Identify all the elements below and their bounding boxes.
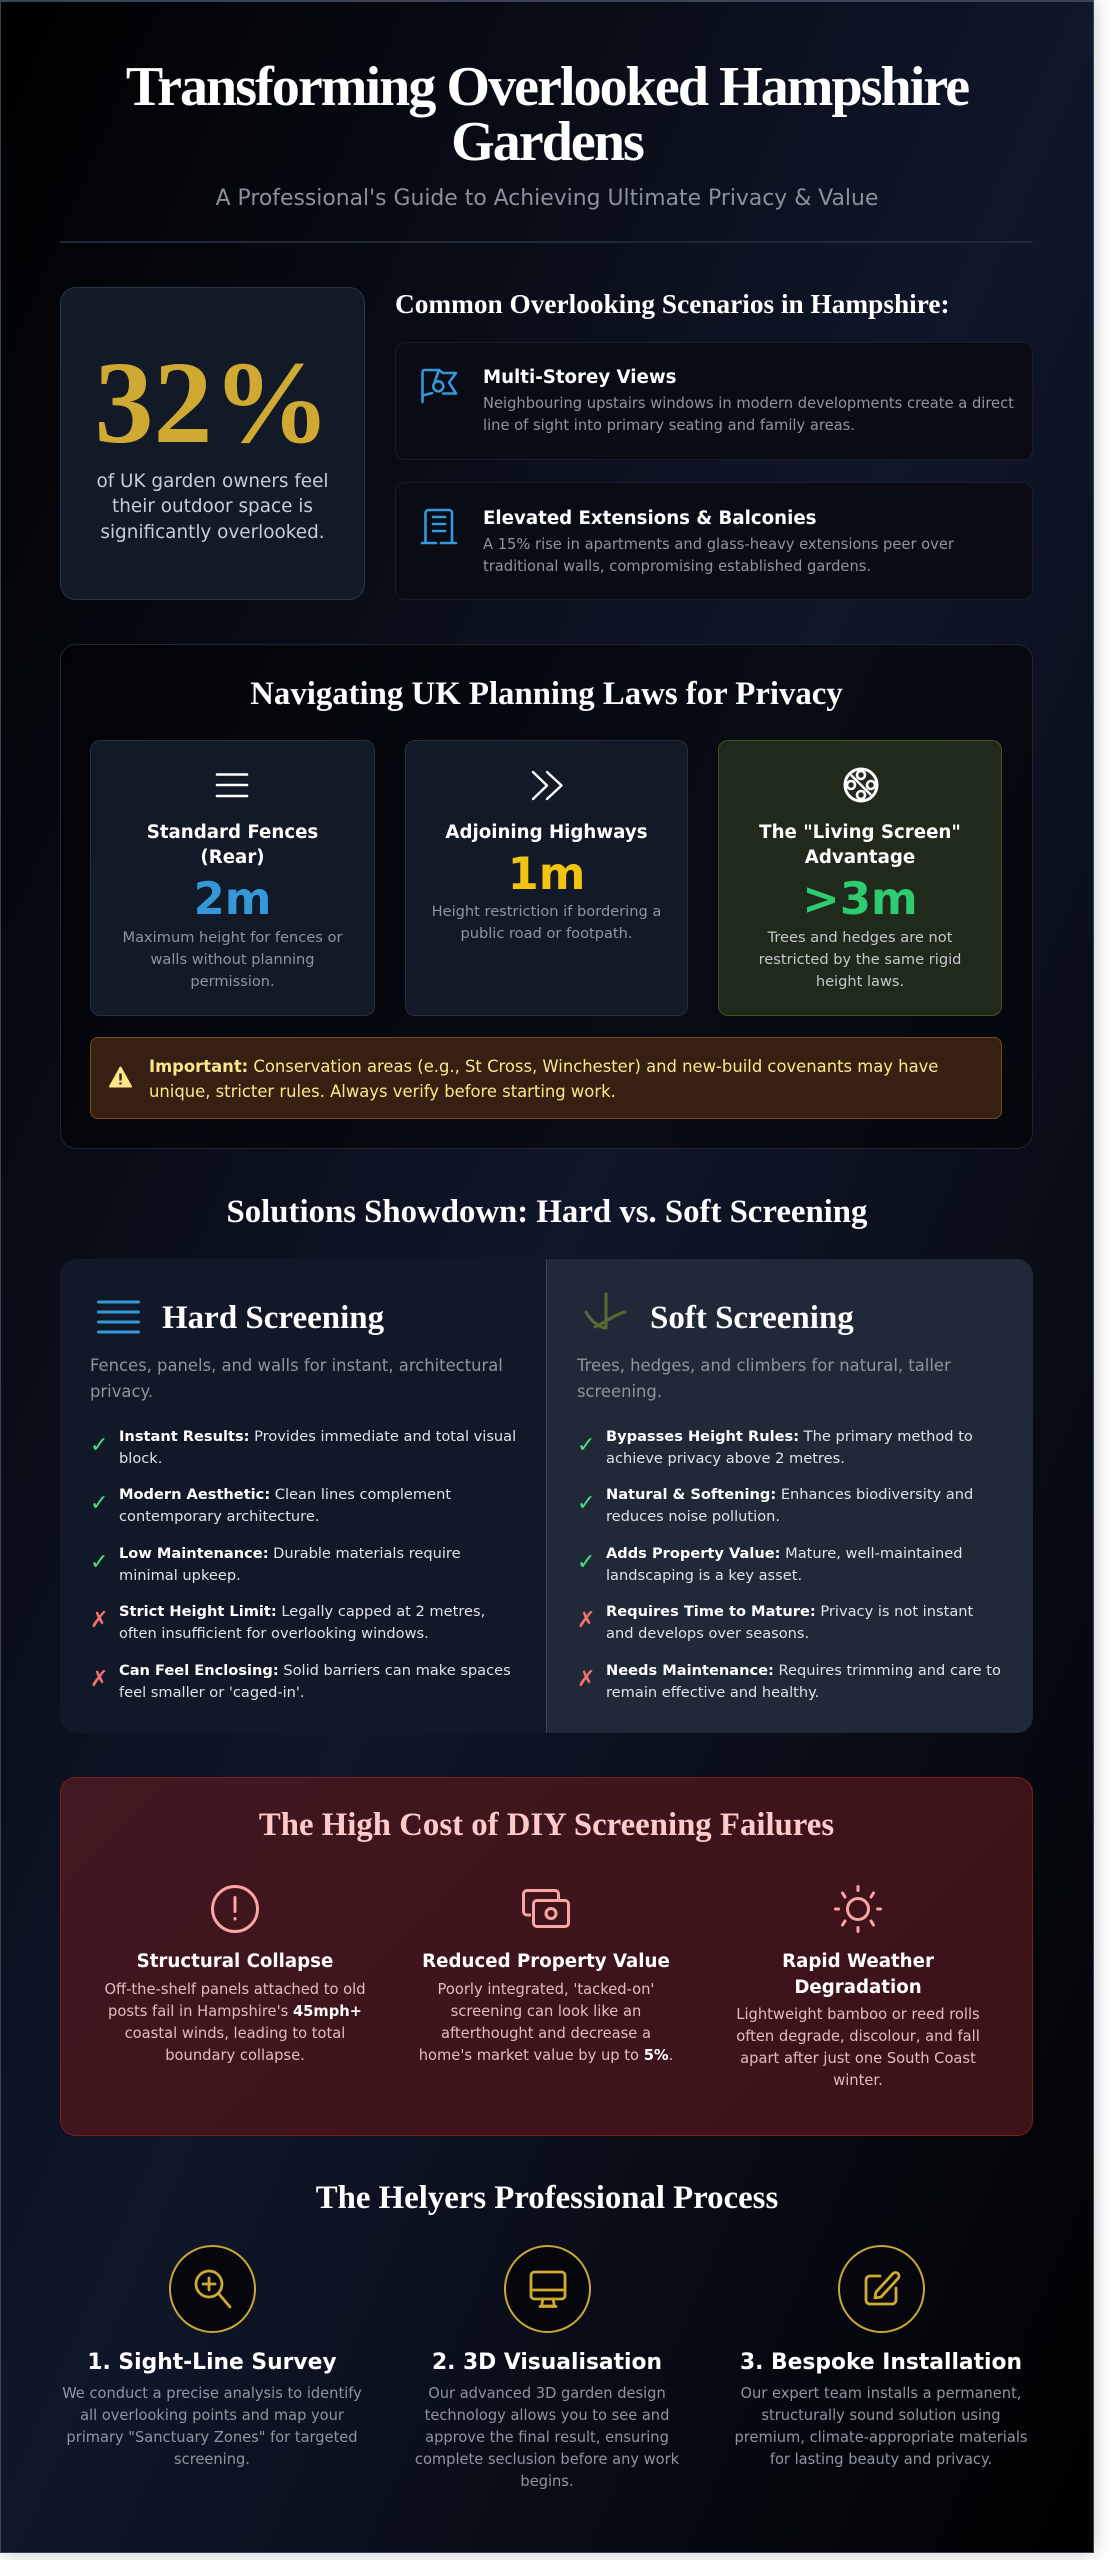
column: hard screening: often insufficient for overlooking windows. bbox=[119, 1625, 429, 1642]
pro: natural and softening bbox=[577, 1486, 973, 1525]
failure: reduced property value bbox=[419, 1889, 673, 2064]
survey description bbox=[42, 2383, 382, 2471]
pro: low maintenance bbox=[90, 1545, 461, 1584]
collapse description: Off-the-shelf panels attached to old bbox=[104, 1980, 366, 1998]
scenario description: traditional walls, compromising established gardens. bbox=[483, 558, 871, 574]
icon: apartment building bbox=[420, 508, 458, 544]
icon: banknotes bbox=[522, 1889, 570, 1928]
con: requires time to mature bbox=[577, 1603, 973, 1642]
living screen label bbox=[759, 822, 961, 868]
column: soft screening: and develops over seasons. bbox=[606, 1625, 809, 1642]
icon: fence lines bbox=[216, 773, 248, 798]
column: hard screening: ✓ bbox=[90, 1491, 108, 1516]
column: soft screening: ✓ bbox=[577, 1550, 595, 1575]
property value description bbox=[419, 1980, 673, 2064]
fence height: 2m bbox=[194, 872, 271, 925]
statistic caption: significantly overlooked. bbox=[100, 522, 325, 542]
DIY failures heading: The High Cost of DIY Screening Failures bbox=[259, 1807, 834, 1843]
title: Gardens bbox=[451, 111, 643, 173]
statistic caption: their outdoor space is bbox=[112, 496, 313, 517]
title bbox=[126, 56, 969, 173]
installation description: premium, climate-appropriate materials bbox=[734, 2429, 1028, 2446]
weather description: winter. bbox=[833, 2072, 883, 2088]
column: hard screening: feel smaller or 'caged-in'. bbox=[119, 1684, 305, 1701]
survey description: all overlooking points and map your bbox=[80, 2407, 344, 2424]
column: hard screening: Instant Results: Provides immediate and total visual bbox=[119, 1428, 516, 1445]
living screen label: Advantage bbox=[805, 846, 915, 868]
visualisation description: Our advanced 3D garden design bbox=[428, 2385, 666, 2402]
fence note: walls without planning bbox=[150, 950, 315, 968]
visualisation description: technology allows you to see and bbox=[425, 2407, 669, 2424]
card: adjoining highways bbox=[405, 740, 688, 1016]
soft screening intro bbox=[576, 1356, 951, 1401]
property value description: Poorly integrated, 'tacked-on' bbox=[438, 1980, 654, 1998]
column: hard screening: contemporary architecture. bbox=[119, 1508, 319, 1525]
highway height: 1m bbox=[508, 847, 585, 900]
fence label bbox=[147, 822, 318, 868]
fence note: Maximum height for fences or bbox=[123, 928, 342, 946]
column: soft screening: remain effective and healthy. bbox=[606, 1684, 819, 1701]
pro: modern aesthetic bbox=[90, 1486, 451, 1525]
living screen height: >3m bbox=[802, 872, 918, 925]
card: standard fences bbox=[90, 740, 375, 1016]
column: hard screening: block. bbox=[119, 1450, 162, 1467]
column: soft screening: ✓ bbox=[577, 1491, 595, 1516]
planning laws heading: Navigating UK Planning Laws for Privacy bbox=[250, 676, 843, 712]
column: hard screening: Low Maintenance: Durable materials require bbox=[119, 1545, 461, 1562]
survey description: screening. bbox=[174, 2451, 250, 2468]
callout: important warning bbox=[90, 1037, 1002, 1119]
warning text: Important: Conservation areas (e.g., St Cross, Winchester) and new-build covenants may have bbox=[149, 1057, 938, 1076]
collapse description: boundary collapse. bbox=[165, 2046, 305, 2064]
icon: tree canopy bbox=[844, 768, 878, 802]
panel: multi-storey views bbox=[395, 342, 1033, 460]
highway note: public road or footpath. bbox=[460, 925, 633, 942]
fence note bbox=[123, 928, 342, 990]
big statistic number: 32% bbox=[94, 337, 330, 468]
collapse description bbox=[104, 1980, 366, 2064]
column: soft screening: landscaping is a key asset. bbox=[606, 1567, 802, 1584]
soft screening heading: Soft Screening bbox=[650, 1300, 854, 1336]
heading: professional process: The Helyers Professional Process bbox=[316, 2180, 778, 2216]
panel: 32% statistic bbox=[60, 287, 365, 600]
living screen note bbox=[759, 928, 961, 990]
statistic caption bbox=[96, 470, 329, 542]
scenario description bbox=[483, 536, 954, 574]
column: soft screening: Requires Time to Mature: Privacy is not instant bbox=[606, 1603, 973, 1620]
living screen note: restricted by the same rigid bbox=[759, 950, 961, 968]
column: hard screening bbox=[60, 1259, 546, 1733]
column: hard screening: minimal upkeep. bbox=[119, 1567, 241, 1584]
column: hard screening: ✗ bbox=[90, 1667, 108, 1692]
visualisation description: approve the final result, ensuring bbox=[425, 2429, 669, 2446]
column: soft screening: achieve privacy above 2 metres. bbox=[606, 1450, 845, 1467]
icon: warning triangle bbox=[109, 1066, 132, 1088]
pro: adds property value bbox=[577, 1545, 963, 1584]
soft screening intro: Trees, hedges, and climbers for natural, taller bbox=[577, 1356, 951, 1375]
column: hard screening: Strict Height Limit: Legally capped at 2 metres, bbox=[119, 1603, 485, 1620]
warning text: unique, stricter rules. Always verify before starting work. bbox=[149, 1082, 616, 1101]
collapse description: coastal winds, leading to total bbox=[125, 2024, 345, 2042]
weather description: Lightweight bamboo or reed rolls bbox=[736, 2006, 980, 2022]
warning text bbox=[149, 1057, 938, 1101]
column: soft screening: Natural & Softening: Enhances biodiversity and bbox=[606, 1486, 973, 1503]
soft screening intro: screening. bbox=[577, 1382, 662, 1401]
property value description: home's market value by up to 5%. bbox=[419, 2046, 673, 2064]
column: soft screening bbox=[546, 1259, 1033, 1733]
scenario description bbox=[483, 395, 1014, 434]
statistic caption: of UK garden owners feel bbox=[96, 470, 329, 492]
weather heading bbox=[782, 1951, 934, 1998]
icon: flag with eye bbox=[421, 368, 458, 404]
survey description: primary "Sanctuary Zones" for targeted bbox=[66, 2429, 358, 2446]
column: hard screening: Modern Aesthetic: Clean lines complement bbox=[119, 1486, 451, 1503]
scenario description: Neighbouring upstairs windows in modern developments create a direct bbox=[483, 395, 1014, 412]
scenario heading: Multi-Storey Views bbox=[483, 367, 676, 388]
installation heading: 3. Bespoke Installation bbox=[740, 2350, 1022, 2374]
con: needs maintenance bbox=[577, 1662, 1001, 1701]
icon: double chevron bbox=[532, 770, 563, 800]
hard screening heading: Hard Screening bbox=[162, 1300, 384, 1336]
heading: solutions showdown: Solutions Showdown: Hard vs. Soft Screening bbox=[227, 1194, 867, 1230]
failure: weather degradation bbox=[736, 1885, 980, 2088]
panel: planning laws bbox=[60, 644, 1033, 1149]
fence label: (Rear) bbox=[200, 846, 265, 868]
icon: sun bbox=[834, 1885, 882, 1933]
panel: elevated extensions bbox=[395, 482, 1033, 600]
weather description bbox=[736, 2006, 980, 2088]
highway label: Adjoining Highways bbox=[445, 822, 648, 842]
subtitle: A Professional's Guide to Achieving Ultimate Privacy & Value bbox=[216, 186, 878, 211]
step: sight-line survey bbox=[42, 2245, 382, 2545]
living screen note: Trees and hedges are not bbox=[768, 928, 952, 946]
scenario description: A 15% rise in apartments and glass-heavy extensions peer over bbox=[483, 536, 954, 552]
header divider bbox=[60, 241, 1033, 243]
icon: edit circle bbox=[838, 2245, 924, 2333]
fence label: Standard Fences bbox=[147, 822, 318, 842]
installation description: structurally sound solution using bbox=[761, 2407, 1001, 2424]
visualisation description: begins. bbox=[520, 2473, 574, 2490]
highway note bbox=[432, 903, 661, 942]
panel: DIY failures bbox=[60, 1777, 1033, 2136]
icon: fence panels bbox=[97, 1300, 140, 1334]
icon: alert circle bbox=[211, 1885, 259, 1933]
icon: plant bbox=[584, 1292, 626, 1330]
weather heading: Degradation bbox=[794, 1977, 922, 1998]
column: soft screening: ✗ bbox=[577, 1667, 595, 1692]
installation description bbox=[711, 2383, 1051, 2471]
column: soft screening: reduces noise pollution. bbox=[606, 1508, 780, 1525]
pro: bypasses height rules bbox=[577, 1428, 973, 1467]
living screen label: The "Living Screen" bbox=[759, 822, 961, 842]
weather heading: Rapid Weather bbox=[782, 1951, 934, 1972]
column: soft screening: ✗ bbox=[577, 1608, 595, 1633]
column: hard screening: ✓ bbox=[90, 1550, 108, 1575]
icon: monitor circle bbox=[504, 2245, 590, 2333]
scenario description: line of sight into primary seating and family areas. bbox=[483, 417, 855, 434]
installation description: for lasting beauty and privacy. bbox=[770, 2451, 992, 2468]
title: Transforming Overlooked Hampshire bbox=[126, 56, 968, 118]
property value description: screening can look like an bbox=[451, 2002, 641, 2020]
step: 3D visualisation bbox=[377, 2245, 717, 2545]
collapse description: posts fail in Hampshire's 45mph+ bbox=[108, 2002, 362, 2020]
collapse heading: Structural Collapse bbox=[137, 1951, 333, 1972]
property value heading: Reduced Property Value bbox=[422, 1951, 670, 1972]
column: soft screening: ✓ bbox=[577, 1433, 595, 1458]
column: soft screening: Needs Maintenance: Requires trimming and care to bbox=[606, 1662, 1001, 1679]
step: bespoke installation bbox=[711, 2245, 1051, 2545]
card: living screen bbox=[718, 740, 1002, 1016]
hard screening intro bbox=[90, 1356, 503, 1401]
panel: hard vs soft comparison bbox=[60, 1259, 1033, 1733]
living screen note: height laws. bbox=[816, 972, 904, 990]
hard screening intro: privacy. bbox=[90, 1382, 153, 1401]
weather description: apart after just one South Coast bbox=[740, 2050, 976, 2066]
column: soft screening: Adds Property Value: Mature, well-maintained bbox=[606, 1545, 963, 1562]
column: hard screening: ✓ bbox=[90, 1433, 108, 1458]
installation description: Our expert team installs a permanent, bbox=[741, 2385, 1021, 2402]
hard screening intro: Fences, panels, and walls for instant, architectural bbox=[90, 1356, 503, 1375]
fence note: permission. bbox=[190, 972, 275, 990]
weather description: often degrade, discolour, and fall bbox=[736, 2028, 980, 2044]
column: soft screening: Bypasses Height Rules: The primary method to bbox=[606, 1428, 973, 1445]
visualisation description: complete seclusion before any work bbox=[415, 2451, 679, 2468]
heading: overlooking scenarios: Common Overlooking Scenarios in Hampshire: bbox=[395, 289, 950, 319]
scenario heading: Elevated Extensions & Balconies bbox=[483, 508, 816, 529]
column: hard screening: ✗ bbox=[90, 1608, 108, 1633]
visualisation heading: 2. 3D Visualisation bbox=[432, 2350, 662, 2374]
survey heading: 1. Sight-Line Survey bbox=[87, 2350, 337, 2374]
survey description: We conduct a precise analysis to identify bbox=[62, 2385, 362, 2402]
column: hard screening: Can Feel Enclosing: Solid barriers can make spaces bbox=[119, 1662, 511, 1679]
pro: instant results bbox=[90, 1428, 516, 1467]
con: can feel enclosing bbox=[90, 1662, 511, 1701]
icon: magnifier circle bbox=[168, 2245, 256, 2333]
failure: structural collapse bbox=[104, 1885, 366, 2064]
property value description: afterthought and decrease a bbox=[441, 2024, 651, 2042]
visualisation description bbox=[377, 2383, 717, 2493]
highway note: Height restriction if bordering a bbox=[432, 903, 661, 920]
con: strict height limit bbox=[90, 1603, 485, 1642]
